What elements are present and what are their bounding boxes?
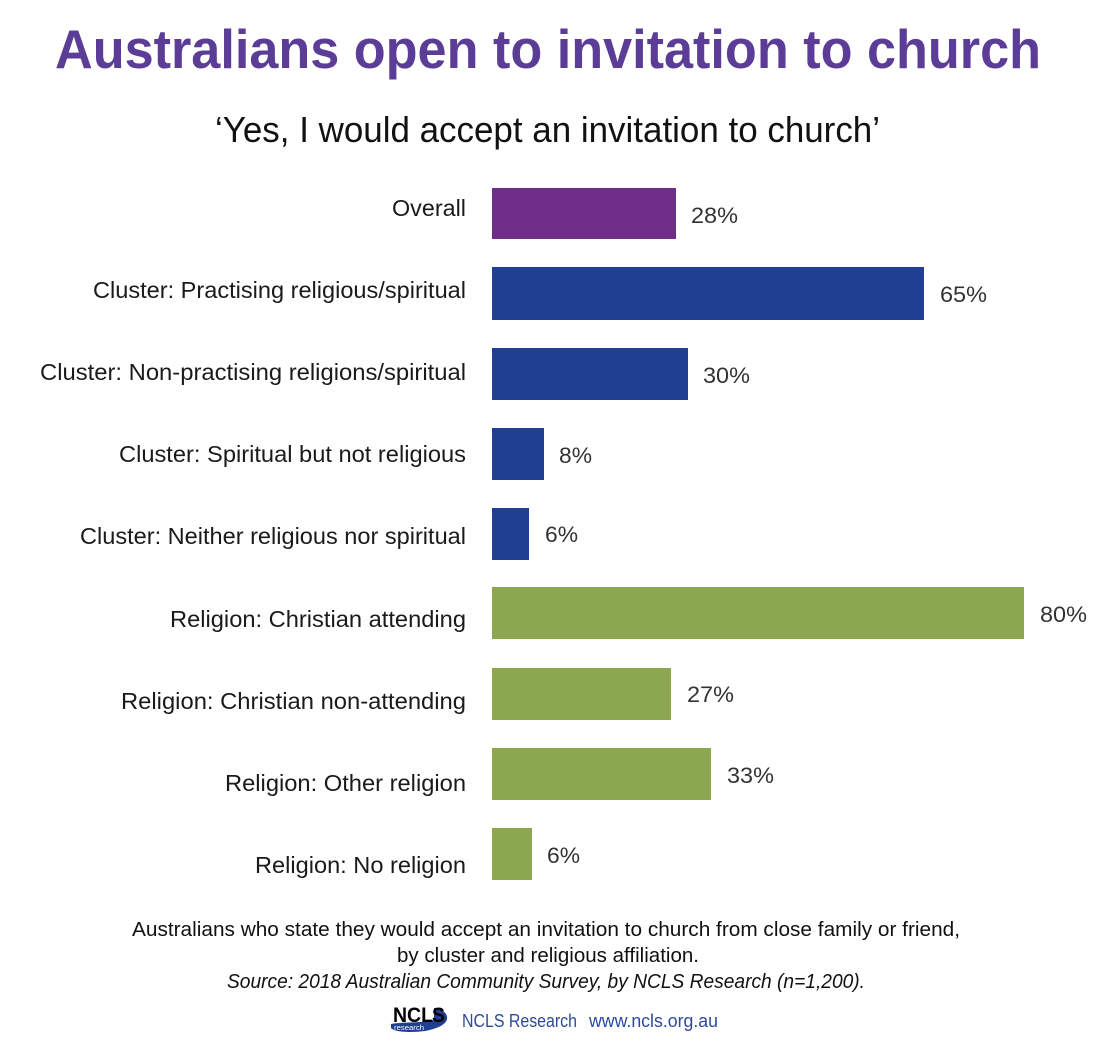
subtitle: ‘Yes, I would accept an invitation to church’ [215, 109, 880, 150]
icon: NCLS logo: S [432, 1004, 445, 1027]
row: Christian non-attending [121, 668, 734, 720]
row: Christian non-attending: Religion: Christian non-attending [121, 688, 466, 714]
row: Cluster non-practising: 30% [703, 363, 750, 388]
row: Cluster spiritual: 8% [559, 443, 592, 468]
row: Christian attending: Religion: Christian attending [170, 606, 466, 632]
row: Overall: 28% [691, 203, 738, 228]
title: Australians open to invitation to church [55, 18, 1041, 80]
row: Overall: Overall [392, 195, 466, 221]
row: Christian attending [170, 587, 1087, 639]
icon: NCLS logo [391, 1004, 447, 1032]
footer brand text: NCLS Research [462, 1011, 577, 1031]
row: No religion: 6% [547, 843, 580, 868]
row: Cluster spiritual: Cluster: Spiritual but not religious [119, 441, 466, 467]
bar chart [40, 188, 1087, 880]
row: Cluster spiritual [119, 428, 592, 480]
icon: NCLS logo: research [394, 1025, 424, 1032]
footnote: Australians who state they would accept an invitation to church from close family or friend, [132, 919, 960, 941]
icon: NCLS logo: NCL [393, 1004, 433, 1027]
row: No religion: Religion: No religion [255, 852, 466, 878]
row: Other religion: 33% [727, 763, 774, 788]
row: Cluster non-practising: Cluster: Non-practising religions/spiritual [40, 359, 466, 385]
footnote: Source: 2018 Australian Community Survey, by NCLS Research (n=1,200). [227, 971, 865, 993]
row: Christian non-attending: 27% [687, 682, 734, 707]
row: Cluster neither: Cluster: Neither religious nor spiritual [80, 523, 466, 549]
row: Other religion [225, 748, 774, 800]
row: Cluster non-practising [40, 348, 750, 400]
footnote: by cluster and religious affiliation. [397, 945, 699, 967]
row: Christian attending: 80% [1040, 602, 1087, 627]
footnote [132, 919, 960, 993]
row: Cluster neither [80, 508, 578, 560]
row: No religion [255, 828, 580, 880]
row: Cluster neither: 6% [545, 522, 578, 547]
row: Other religion: Religion: Other religion [225, 770, 466, 796]
footer brand text [462, 1011, 718, 1031]
row: Cluster practising [93, 267, 987, 320]
footer brand text: www.ncls.org.au [588, 1011, 718, 1031]
row: Cluster practising: Cluster: Practising religious/spiritual [93, 277, 466, 303]
row: Cluster practising: 65% [940, 282, 987, 307]
row: Overall [392, 188, 738, 239]
